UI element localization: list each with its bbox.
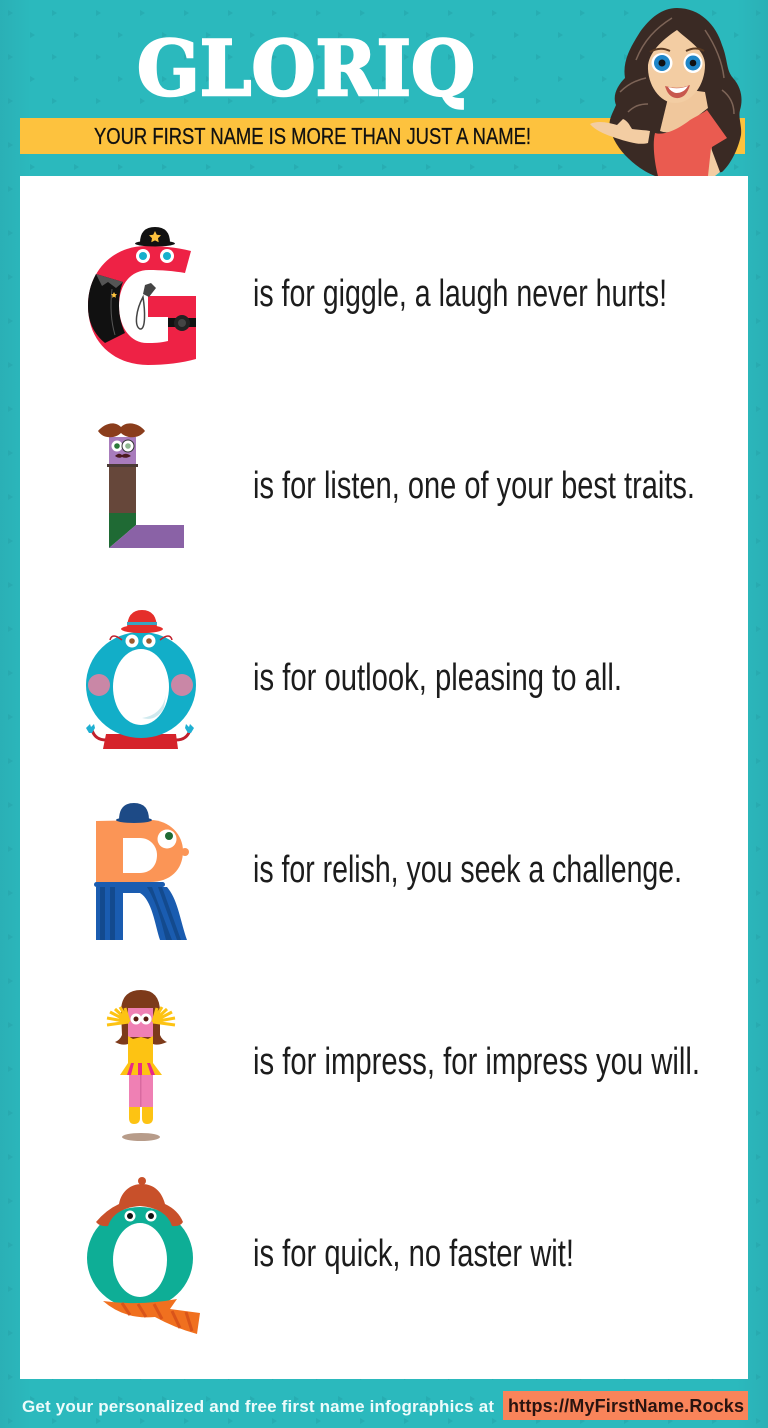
row 2: listen xyxy=(98,423,695,548)
text: outlook line: is for outlook, pleasing to all. xyxy=(253,657,622,699)
icon: letter I cheerleader xyxy=(107,990,175,1141)
row 5: impress xyxy=(107,990,700,1141)
icon: letter G police officer xyxy=(88,227,196,365)
text: quick line: is for quick, no faster wit! xyxy=(253,1233,574,1275)
row 3: outlook xyxy=(86,610,622,749)
footer link badge: https://MyFirstName.Rocks xyxy=(508,1396,744,1416)
row 1: giggle xyxy=(88,227,667,365)
icon: letter R with bowler hat xyxy=(94,803,189,940)
footer link badge xyxy=(503,1391,748,1420)
icon: letter O with hat xyxy=(86,610,196,749)
subtitle banner: YOUR FIRST NAME IS MORE THAN JUST A NAME! xyxy=(94,123,531,149)
row 6: quick xyxy=(87,1177,574,1334)
subtitle banner xyxy=(20,118,745,154)
title: GLORIQ xyxy=(137,24,475,113)
white content panel xyxy=(20,176,748,1379)
footer text: Get your personalized and free first name infographics at xyxy=(22,1397,494,1416)
icon: letter Q with winter hat and scarf xyxy=(87,1177,200,1334)
icon: letter L detective xyxy=(98,423,184,548)
icon: cartoon woman mascot xyxy=(590,8,742,176)
row 4: relish xyxy=(94,803,682,940)
